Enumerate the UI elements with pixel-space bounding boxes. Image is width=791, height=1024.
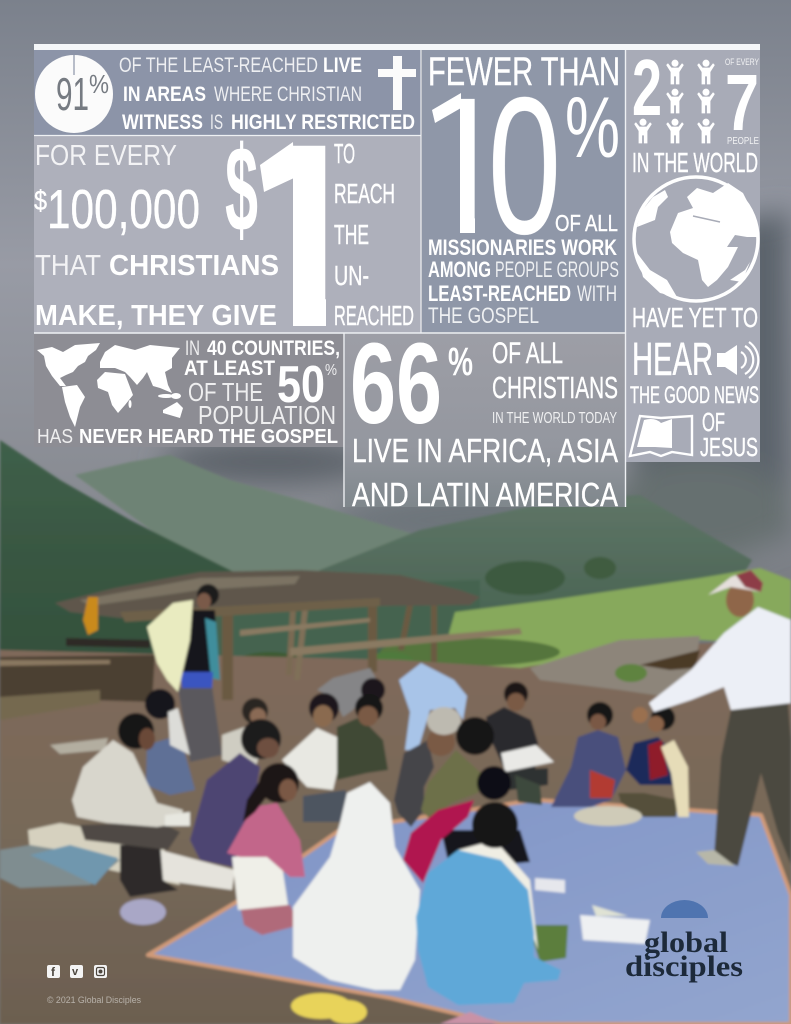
icon: seven people (634, 60, 715, 143)
text: of jesus (700, 407, 758, 462)
text: of all christians: OF ALL (492, 337, 563, 370)
text: least-reached statement: LIVE (323, 54, 362, 77)
text: live in africa, asia and latin america (352, 432, 618, 513)
social icons (47, 965, 107, 979)
text: giving statement: THAT (35, 250, 101, 282)
text: to reach the unreached: UN- (334, 260, 369, 291)
text: live in africa, asia and latin america: LIVE IN AFRICA, ASIA (352, 432, 618, 469)
text: of all christians: IN THE WORLD TODAY (492, 410, 617, 427)
text: least-reached statement: OF THE LEAST-REACHED (119, 54, 318, 77)
pie chart: 91 percent (35, 55, 113, 133)
text: giving statement: MAKE, THEY GIVE (35, 300, 277, 332)
text: missionaries statement: MISSIONARIES WORK (428, 235, 617, 260)
text: giving statement: $ (34, 185, 47, 216)
text: missionaries statement: OF ALL (555, 210, 618, 236)
standing man in white shirt (632, 570, 791, 866)
text: to reach the unreached: TO (334, 138, 355, 169)
lumber pile (0, 655, 155, 754)
big 10 percent: 1 (416, 57, 512, 275)
panel: 66 percent (345, 320, 625, 513)
shelter (55, 570, 522, 700)
big dollar one: 1 (232, 89, 372, 382)
big 10 percent (432, 93, 618, 236)
text: of jesus: JESUS (700, 432, 758, 462)
text: 40 countries statement: HAS (37, 426, 73, 448)
text: missionaries statement: PEOPLE GROUPS (495, 257, 619, 282)
stat: 2 of every 7 people (632, 43, 759, 147)
text: hear: HEAR (632, 333, 713, 385)
panel: for every 100,000 dollars (34, 136, 420, 332)
text: least-reached statement: WHERE CHRISTIAN (214, 83, 362, 106)
text: 40 countries statement: AT LEAST (184, 357, 275, 380)
icon: cross (378, 56, 416, 110)
panel: 91 percent least-reached (34, 50, 421, 135)
text: to reach the unreached (334, 138, 414, 331)
text: least-reached statement: IS (210, 111, 223, 134)
standing woman (147, 584, 222, 762)
text: least-reached statement: WITNESS (122, 111, 203, 134)
seated group left (72, 668, 388, 935)
heading: fewer than: FEWER THAN (428, 50, 620, 94)
stat: 2 of every 7 people: 7 (725, 58, 759, 147)
text: 40 countries statement: OF THE (188, 377, 263, 407)
copyright: © 2021 Global Disciples (47, 995, 141, 1005)
icon: world map (37, 343, 183, 427)
stat: 2 of every 7 people: 2 (632, 43, 662, 132)
text: of jesus: OF (702, 407, 725, 437)
white shawl woman (293, 782, 420, 990)
white top bar (34, 44, 760, 50)
stat: 2 of every 7 people: OF EVERY (725, 57, 759, 67)
logo: global disciples: disciples (625, 950, 743, 983)
icon: globe (634, 177, 758, 301)
panel: fewer than 10 percent (416, 50, 625, 332)
text: to reach the unreached: REACHED (334, 300, 414, 331)
text: missionaries statement: LEAST-REACHED (428, 281, 571, 306)
text: giving statement (34, 140, 279, 332)
text: giving statement: FOR EVERY (35, 140, 177, 172)
text: least-reached statement (119, 54, 415, 134)
social icons: f (51, 965, 56, 979)
text: least-reached statement: IN AREAS (123, 83, 206, 106)
seated women right (551, 702, 689, 826)
text: 40 countries statement: POPULATION (198, 400, 336, 430)
text: 40 countries statement (37, 337, 340, 448)
icon: open bible (630, 416, 692, 456)
pie chart: 91 percent: 91 (56, 68, 89, 120)
text: of all christians (492, 337, 618, 427)
text: 40 countries statement: IN (185, 337, 200, 360)
panel: 2 of every 7 people (626, 43, 760, 462)
chair and seated group centre (394, 663, 554, 827)
pie chart: 91 percent: % (89, 69, 109, 99)
front seated women (403, 766, 650, 1005)
social icons: v (72, 966, 79, 978)
text: 40 countries statement: % (325, 362, 337, 379)
text: 40 countries statement: 50 (277, 356, 325, 414)
big 10 percent: 0 (488, 57, 561, 275)
text: missionaries statement: AMONG (428, 257, 491, 282)
text: to reach the unreached: REACH (334, 178, 395, 209)
tarp (148, 800, 791, 1024)
text: 40 countries statement: NEVER HEARD THE GOSPEL (79, 426, 338, 448)
logo: global disciples: global (644, 926, 728, 959)
text: giving statement: CHRISTIANS (109, 250, 279, 282)
panel: 40 countries (34, 334, 344, 448)
big 66 percent: 66 (350, 320, 442, 448)
big 10 percent: % (565, 80, 620, 176)
stat: 2 of every 7 people: PEOPLE (727, 136, 759, 147)
text: live in africa, asia and latin america: AND LATIN AMERICA (352, 476, 618, 513)
panel divider lines (34, 50, 626, 507)
text: missionaries statement (428, 210, 619, 328)
text: giving statement: 100,000 (47, 178, 200, 240)
text: least-reached statement: HIGHLY RESTRICTED (231, 111, 415, 134)
shoes and cloth (0, 823, 500, 1024)
text: missionaries statement: WITH (577, 281, 617, 306)
big 66 percent: % (448, 340, 473, 384)
logo: global disciples (625, 900, 743, 983)
text: 40 countries statement: 40 COUNTRIES, (207, 337, 340, 360)
text: of all christians: CHRISTIANS (492, 370, 618, 405)
text: missionaries statement: THE GOSPEL (428, 303, 539, 328)
icon: speaker (717, 342, 758, 378)
big dollar one (226, 140, 326, 326)
big dollar one: $ (225, 121, 258, 257)
text: to reach the unreached: THE (334, 219, 369, 250)
